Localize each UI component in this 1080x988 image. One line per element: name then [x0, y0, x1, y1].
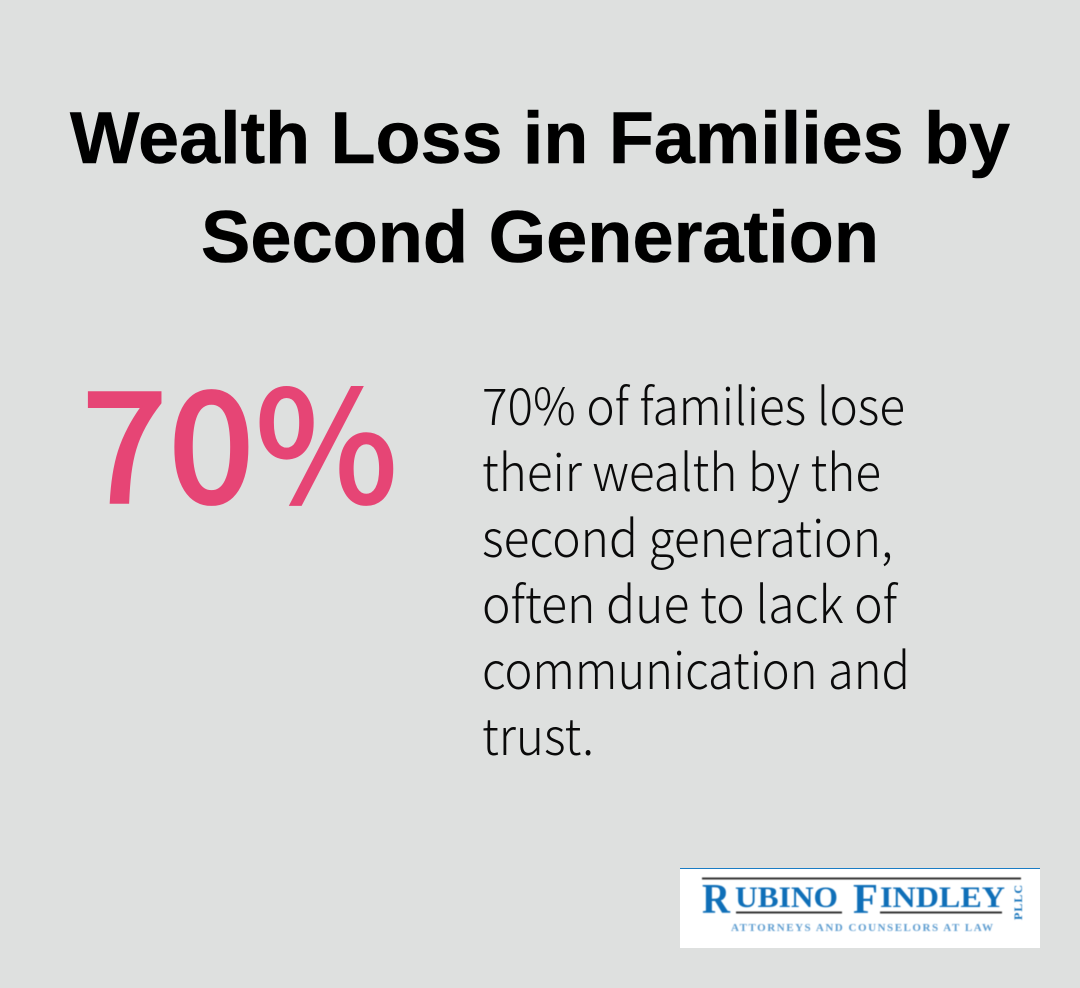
logo: Rubino Findley: INDLEY [880, 881, 1005, 914]
description text block [482, 366, 910, 770]
logo: Rubino Findley: PLLC [1011, 885, 1025, 920]
logo: Rubino Findley: ATTORNEYS AND COUNSELORS AT LAW [731, 922, 993, 934]
description text block: their wealth by the [482, 432, 881, 506]
description text block: second generation, [482, 498, 893, 572]
title: Wealth Loss in Families by [70, 98, 1010, 179]
logo: Rubino Findley: UBINO [735, 881, 838, 914]
description text block: trust. [482, 696, 594, 770]
logo: Rubino Findley [680, 868, 1040, 948]
logo: Rubino Findley: R [702, 877, 731, 923]
logo: Rubino Findley: F [853, 877, 878, 923]
title [70, 98, 1010, 278]
description text block: communication and [482, 630, 910, 704]
big statistic: 70%: 70% [81, 323, 398, 548]
title: Second Generation [201, 197, 879, 278]
description text block: often due to lack of [482, 564, 899, 638]
description text block: 70% of families lose [482, 366, 905, 440]
